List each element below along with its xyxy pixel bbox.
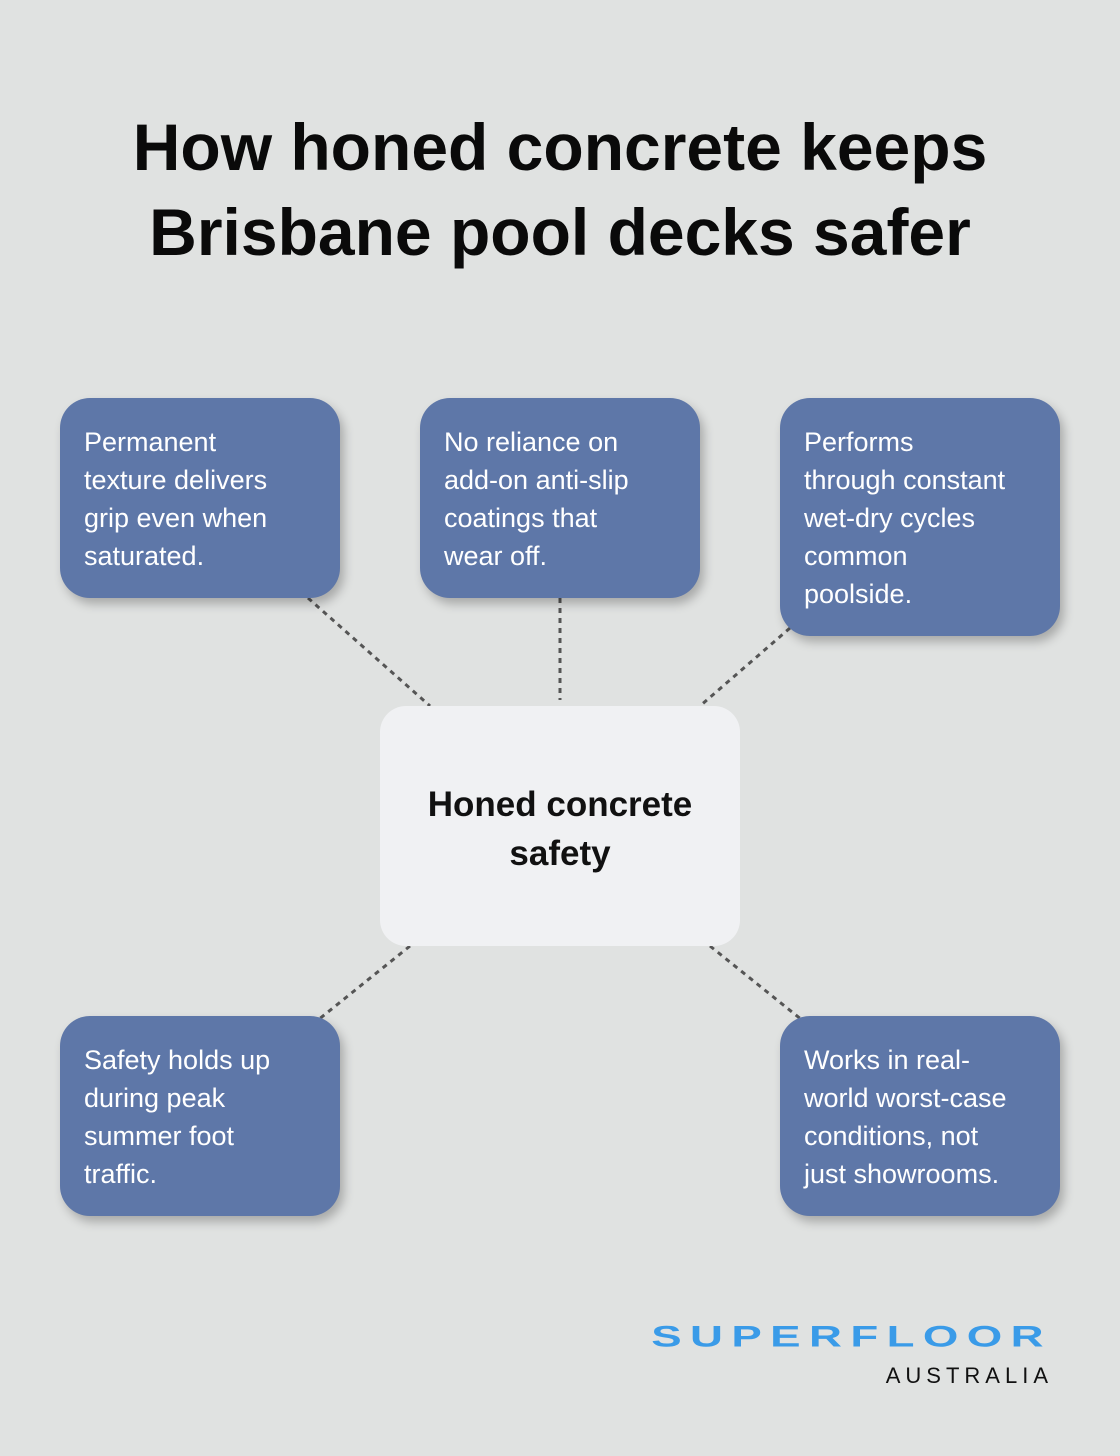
box: worst-case: just showrooms. bbox=[804, 1159, 999, 1189]
box: permanent texture: saturated. bbox=[84, 541, 204, 571]
box: summer traffic: Safety holds up bbox=[84, 1045, 270, 1075]
box: no reliance: add-on anti-slip bbox=[444, 465, 629, 495]
box: worst-case: Works in real- bbox=[804, 1045, 970, 1075]
box: wet-dry cycles bbox=[780, 398, 1060, 636]
box: summer traffic bbox=[60, 1016, 340, 1216]
box: wet-dry cycles: poolside. bbox=[804, 579, 912, 609]
logo: AUSTRALIA bbox=[886, 1363, 1053, 1388]
box: permanent texture: texture delivers bbox=[84, 465, 267, 495]
box: worst-case bbox=[780, 1016, 1060, 1216]
box: no reliance: wear off. bbox=[444, 541, 547, 571]
box: wet-dry cycles: through constant bbox=[804, 465, 1005, 495]
box: wet-dry cycles: wet-dry cycles bbox=[804, 503, 975, 533]
logo bbox=[651, 1321, 1053, 1388]
box: permanent texture: grip even when bbox=[84, 503, 267, 533]
box: no reliance: No reliance on bbox=[444, 427, 618, 457]
box: summer traffic: summer foot bbox=[84, 1121, 234, 1151]
title: Brisbane pool decks safer bbox=[149, 195, 971, 269]
box: wet-dry cycles: common bbox=[804, 541, 908, 571]
box: worst-case: conditions, not bbox=[804, 1121, 978, 1151]
box: no reliance bbox=[420, 398, 700, 598]
center box: Honed concrete bbox=[428, 785, 692, 824]
logo: SUPERFLOOR bbox=[651, 1321, 1052, 1354]
box: permanent texture: Permanent bbox=[84, 427, 216, 457]
box: summer traffic: during peak bbox=[84, 1083, 225, 1113]
title: How honed concrete keeps bbox=[133, 110, 987, 184]
title bbox=[133, 110, 987, 269]
box: wet-dry cycles: Performs bbox=[804, 427, 914, 457]
box: worst-case: world worst-case bbox=[804, 1083, 1007, 1113]
box: permanent texture bbox=[60, 398, 340, 598]
center box: safety bbox=[509, 834, 611, 873]
box: summer traffic: traffic. bbox=[84, 1159, 157, 1189]
box: no reliance: coatings that bbox=[444, 503, 597, 533]
center box bbox=[380, 706, 740, 946]
